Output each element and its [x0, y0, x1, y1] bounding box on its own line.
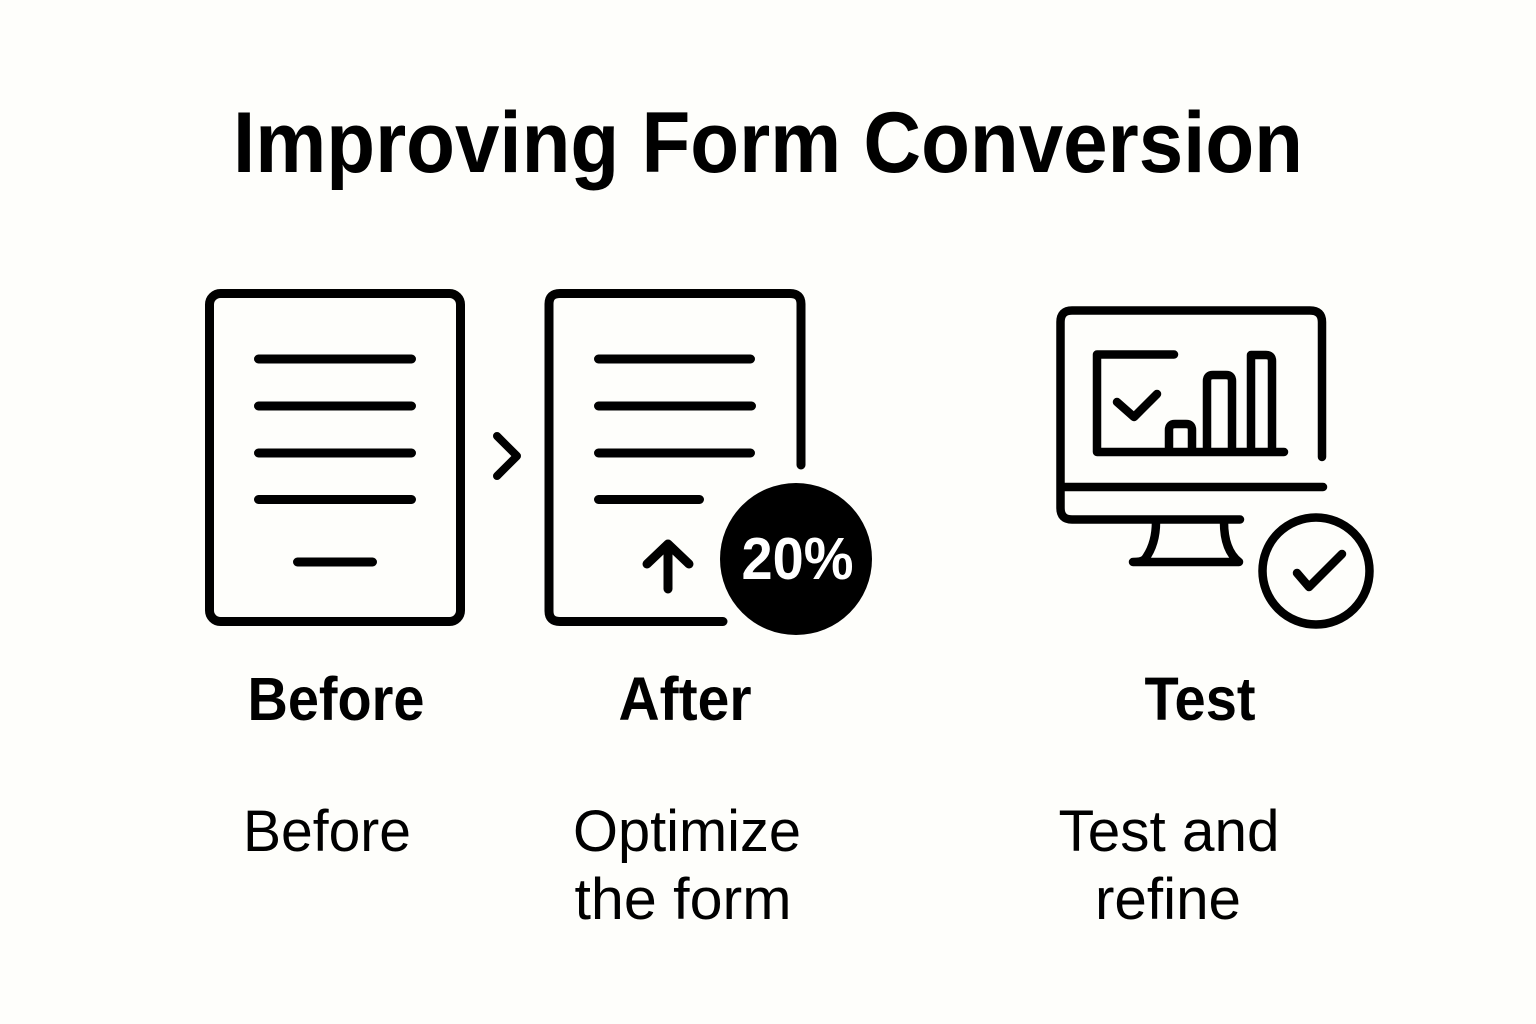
icon: arrow chevron — [497, 436, 517, 476]
text: Optimize the form caption: the form — [574, 867, 792, 932]
badge: 20%: 20% — [742, 526, 854, 592]
icon: after form document — [549, 294, 801, 622]
text: Optimize the form caption: Optimize — [573, 799, 801, 864]
text: Optimize the form caption — [573, 799, 801, 932]
icon: up arrow — [647, 544, 689, 589]
icon: test monitor with chart — [1060, 310, 1323, 562]
icon: before form document — [210, 294, 460, 622]
title: Improving Form Conversion — [233, 95, 1303, 191]
label: Test heading: Test — [1144, 665, 1256, 733]
label: After heading: After — [618, 665, 752, 733]
text: Test and refine caption — [1058, 799, 1280, 932]
icon: check circle — [1262, 518, 1370, 624]
text: Test and refine caption: refine — [1095, 867, 1241, 932]
text: Test and refine caption: Test and — [1058, 799, 1280, 864]
text: Before caption: Before — [243, 799, 411, 864]
badge: 20% — [720, 483, 872, 635]
label: Before heading: Before — [248, 665, 424, 733]
